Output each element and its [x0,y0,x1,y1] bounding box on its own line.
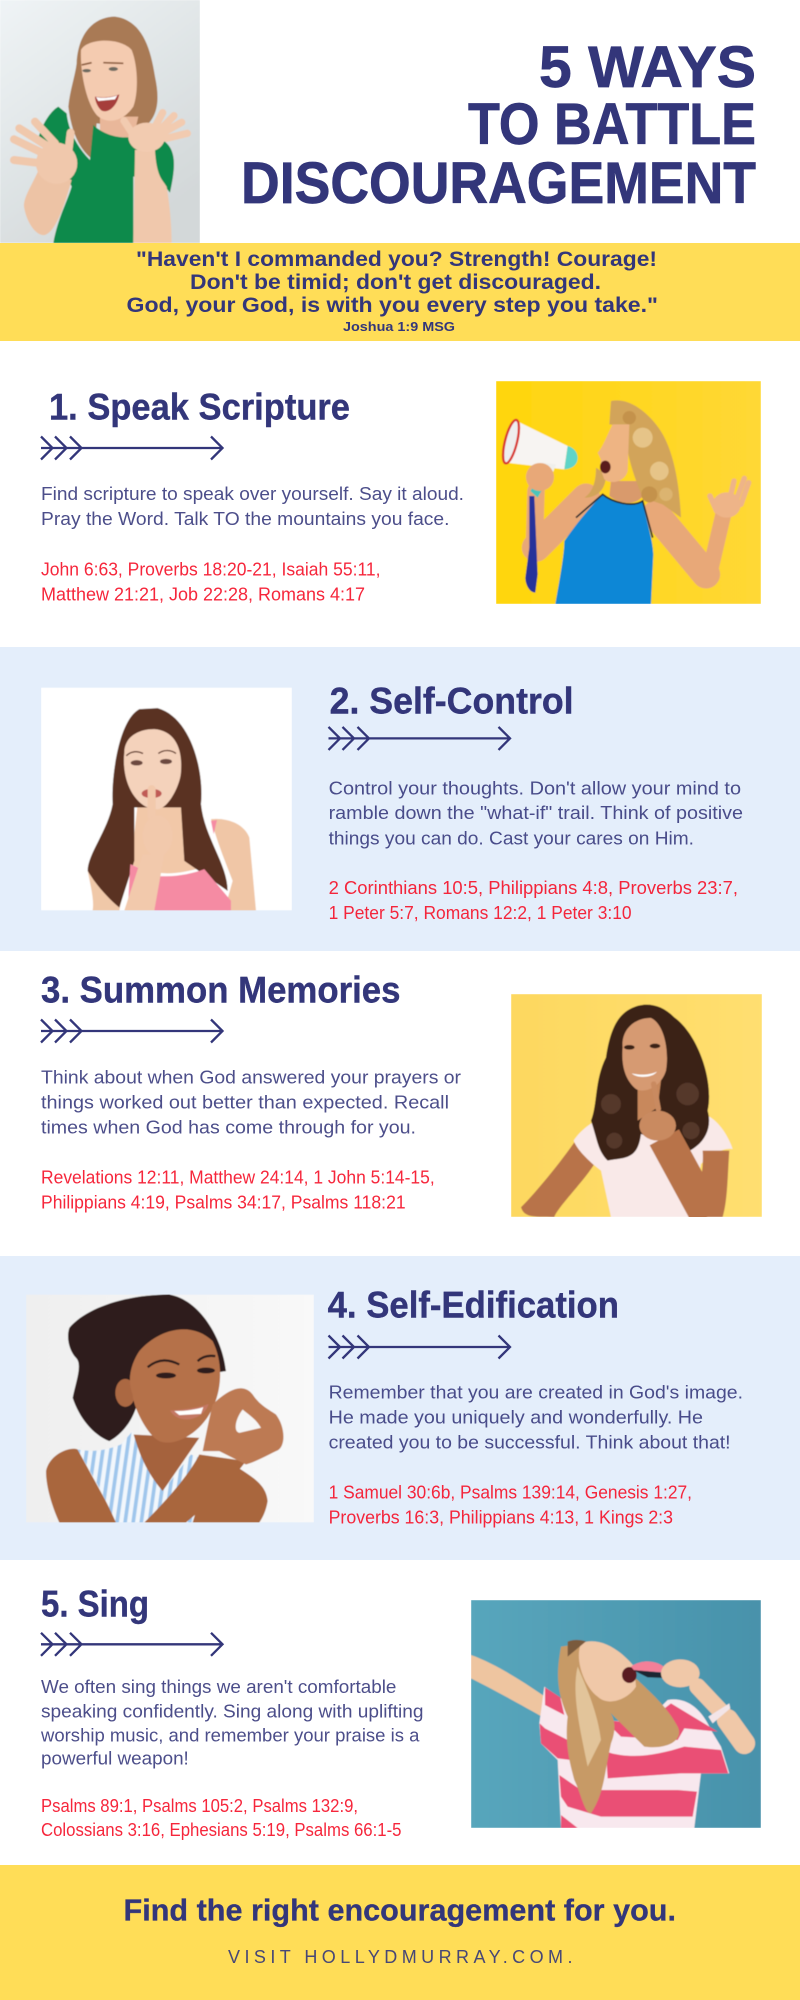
photo: smiling woman thinking on yellow [511,994,762,1217]
body text: Think about when God answered your prayers or [41,1068,461,1088]
scripture references [41,1796,402,1840]
body text: speaking confidently. Sing along with uplifting [41,1701,423,1721]
scripture references: Psalms 89:1, Psalms 105:2, Psalms 132:9, [41,1796,358,1816]
body text: created you to be successful. Think about that! [329,1432,731,1452]
panel: 5. Sing [40,1584,761,1840]
body text: worship music, and remember your praise is a [40,1725,420,1745]
scripture references: Revelations 12:11, Matthew 24:14, 1 John 5:14-15, [41,1167,435,1187]
panel: header [0,0,756,243]
footer link: VISIT HOLLYDMURRAY.COM. [228,1947,572,1967]
scripture references [41,559,380,604]
body text [41,1068,461,1137]
body text: ramble down the "what-if" trail. Think of positive [329,803,743,823]
body text: Pray the Word. Talk TO the mountains you face. [41,509,450,529]
scripture references: John 6:63, Proverbs 18:20-21, Isaiah 55:11, [41,559,380,579]
footer heading: Find the right encouragement for you. [124,1893,676,1928]
body text: Find scripture to speak over yourself. Say it aloud. [41,484,464,504]
panel: 2. Self-Control [0,647,800,951]
heading: 3. Summon Memories [41,969,400,1010]
body text: Control your thoughts. Don't allow your mind to [329,778,741,798]
body text: things worked out better than expected. Recall [41,1092,449,1112]
scripture references [329,1482,692,1527]
photo: woman shouting into megaphone [496,381,761,604]
body text: powerful weapon! [41,1748,189,1768]
panel: scripture quote band: Joshua 1:9 MSG [343,319,455,334]
photo: excited woman in green shirt [0,0,200,243]
body text: things you can do. Cast your cares on Him. [329,828,694,848]
panel: scripture quote band: God, your God, is with you every step you take." [126,294,658,317]
photo: woman with finger on lips [41,688,292,910]
panel: scripture quote band [0,243,800,341]
body text [41,484,464,529]
panel: 3. Summon Memories [41,969,762,1217]
scripture references: Colossians 3:16, Ephesians 5:19, Psalms 66:1-5 [41,1820,402,1840]
heading: 4. Self-Edification [328,1284,619,1325]
arrow [41,1633,223,1656]
photo: woman singing into hairbrush [471,1600,761,1828]
panel: scripture quote band: Don't be timid; don't get discouraged. [190,271,601,294]
body text [329,1382,743,1452]
scripture references: 1 Samuel 30:6b, Psalms 139:14, Genesis 1:27, [329,1482,692,1502]
photo: smiling woman making heart with hands [26,1294,314,1522]
scripture references: 1 Peter 5:7, Romans 12:2, 1 Peter 3:10 [329,903,632,923]
panel: footer call to action [0,1865,800,2000]
arrow [328,727,510,750]
body text: We often sing things we aren't comfortable [41,1677,396,1697]
scripture references: Matthew 21:21, Job 22:28, Romans 4:17 [41,584,365,604]
title: DISCOURAGEMENT [241,151,756,216]
arrow [41,436,223,460]
body text [40,1677,423,1768]
body text: He made you uniquely and wonderfully. He [329,1407,703,1427]
panel: 1. Speak Scripture [41,381,761,604]
scripture references: 2 Corinthians 10:5, Philippians 4:8, Proverbs 23:7, [329,878,738,898]
arrow [41,1020,223,1042]
panel: scripture quote band: "Haven't I commanded you? Strength! Courage! [136,248,657,271]
scripture references: Proverbs 16:3, Philippians 4:13, 1 Kings 2:3 [329,1507,673,1527]
body text [329,778,743,848]
panel: 4. Self-Edification [0,1256,800,1560]
title [241,35,756,216]
title: TO BATTLE [468,92,756,157]
scripture references [41,1167,435,1212]
heading: 2. Self-Control [330,681,574,722]
heading: 1. Speak Scripture [49,386,350,428]
scripture references: Philippians 4:19, Psalms 34:17, Psalms 118:21 [41,1192,406,1212]
scripture references [329,878,738,923]
heading: 5. Sing [41,1584,149,1625]
arrow [328,1336,510,1358]
title: 5 WAYS [539,35,756,100]
body text: Remember that you are created in God's image. [329,1382,743,1402]
body text: times when God has come through for you. [41,1117,416,1137]
